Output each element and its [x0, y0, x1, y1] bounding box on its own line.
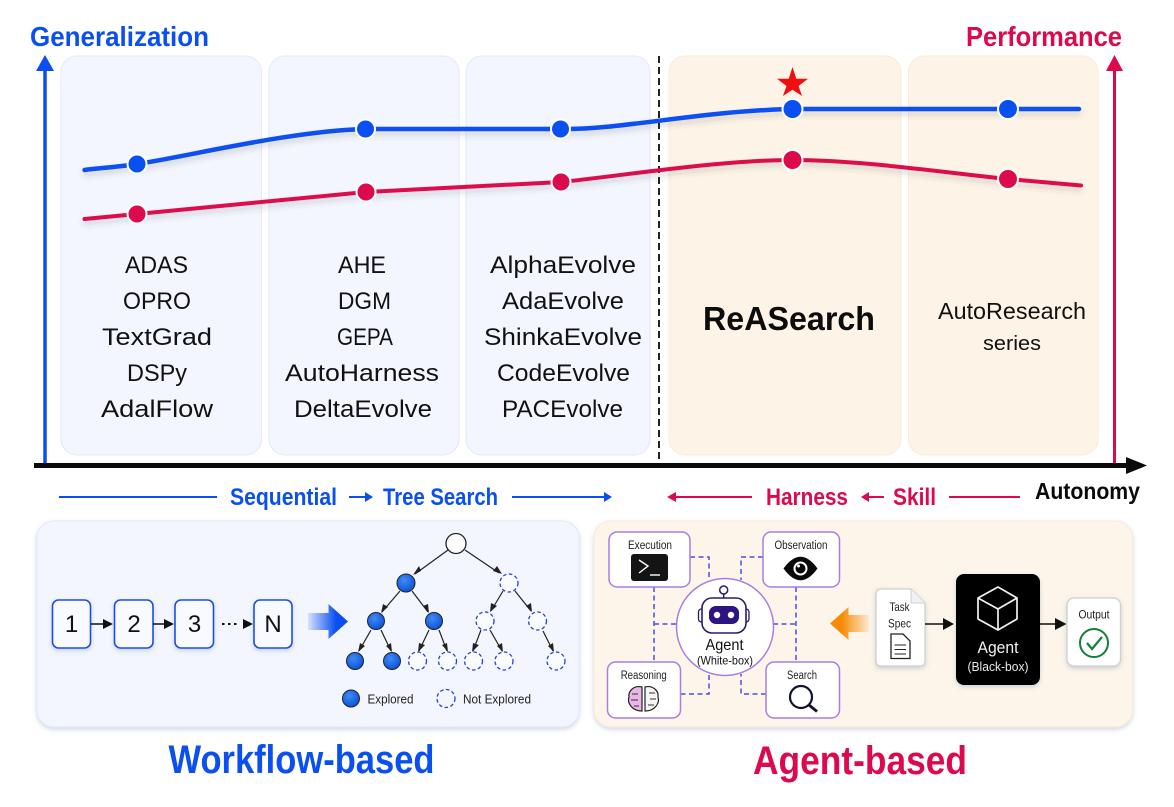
- panel: column AlphaEvolve group: [466, 56, 650, 455]
- sequential step boxes: 2: [127, 611, 141, 638]
- band: sequential to tree search: Sequential: [230, 484, 337, 511]
- text block: first method list: OPRO: [123, 288, 191, 315]
- text block: second method list: GEPA: [337, 324, 393, 351]
- arrow: sequential to tree: [308, 604, 348, 639]
- icon: red star: [777, 67, 808, 96]
- legend: not explored: Not Explored: [463, 692, 531, 706]
- heading: Workflow-based: Workflow-based: [168, 738, 434, 782]
- x axis: autonomy: [34, 457, 1147, 474]
- y axis: generalization: [36, 55, 54, 465]
- arrow: agent to output: [1040, 618, 1066, 630]
- text block: third method list: AdaEvolve: [502, 288, 624, 315]
- white-box agent circle: (White-box): [697, 654, 753, 668]
- axis title: Autonomy: Autonomy: [1035, 478, 1140, 504]
- text block: third method list: CodeEvolve: [497, 360, 630, 387]
- panel: column AHE group: [269, 56, 459, 455]
- black-box agent: Agent: [978, 638, 1019, 657]
- legend: explored: [342, 690, 414, 707]
- arrow: spec to agent: [925, 618, 954, 630]
- text block: first method list: DSPy: [127, 360, 187, 387]
- text block: second method list: [285, 252, 439, 423]
- panel: column ADAS group: [61, 56, 262, 455]
- text block: third method list: PACEvolve: [502, 396, 623, 423]
- band: skill to harness: Skill: [893, 484, 936, 511]
- legend: not explored: [437, 690, 531, 708]
- text block: third method list: ShinkaEvolve: [484, 324, 642, 351]
- panel: column ReASearch: [669, 56, 901, 455]
- card: observation: [763, 532, 840, 587]
- axis title: Generalization: Generalization: [30, 21, 209, 52]
- text block: ReASearch: ReASearch: [703, 300, 875, 337]
- document: task spec: Task: [890, 600, 910, 614]
- sequential step boxes: N: [264, 611, 282, 638]
- text block: third method list: [484, 252, 642, 423]
- card: output: [1067, 598, 1120, 666]
- text block: first method list: TextGrad: [102, 324, 212, 351]
- text block: first method list: [101, 252, 214, 423]
- white-box agent circle: [676, 578, 774, 676]
- black-box agent: (Black-box): [968, 659, 1028, 674]
- text block: AutoResearch series: series: [983, 333, 1041, 355]
- tree search diagram: [346, 534, 565, 670]
- document: task spec: [876, 589, 925, 666]
- text block: second method list: DGM: [338, 288, 391, 315]
- text block: AutoResearch series: AutoResearch: [938, 298, 1086, 324]
- divider: workflow and agent boundary: [658, 56, 660, 465]
- card: reasoning: Reasoning: [621, 670, 667, 682]
- sequential step boxes: 1: [65, 611, 78, 638]
- panel: agent-based: [594, 521, 1132, 727]
- dashed connectors: [654, 557, 796, 694]
- white-box agent circle: Agent: [706, 637, 744, 654]
- card: execution: Execution: [628, 540, 672, 552]
- text block: second method list: AHE: [338, 252, 386, 279]
- text block: AutoResearch series: [938, 298, 1086, 355]
- line chart: generalization curve: [84, 99, 1079, 174]
- heading: Agent-based: Agent-based: [753, 739, 967, 783]
- card: observation: Observation: [774, 540, 828, 552]
- text block: first method list: AdalFlow: [101, 396, 214, 423]
- sequential step boxes: [52, 600, 292, 648]
- band: sequential to tree search: [59, 484, 612, 511]
- band: skill to harness: Harness: [766, 484, 848, 511]
- band: sequential to tree search: Tree Search: [383, 484, 498, 511]
- card: search: Search: [787, 670, 817, 682]
- black-box agent: [956, 574, 1040, 685]
- sequential step boxes: 3: [188, 611, 201, 638]
- card: reasoning: [608, 662, 680, 718]
- icon: robot: [698, 586, 749, 633]
- band: skill to harness: [667, 484, 1020, 511]
- text block: first method list: ADAS: [125, 252, 188, 279]
- line chart: performance curve: [84, 150, 1081, 224]
- card: execution: [609, 532, 690, 587]
- text block: third method list: AlphaEvolve: [490, 252, 636, 279]
- text block: second method list: DeltaEvolve: [294, 396, 432, 423]
- panel: column AutoResearch: [908, 56, 1098, 455]
- axis title: Performance: Performance: [966, 21, 1122, 52]
- legend: explored: Explored: [368, 692, 414, 706]
- panel: workflow-based: [37, 521, 579, 727]
- card: search: [766, 662, 840, 718]
- document: task spec: Spec: [888, 616, 911, 630]
- y axis: performance: [1106, 55, 1123, 465]
- card: output: Output: [1078, 608, 1110, 622]
- arrow: black-box to white-box: [830, 607, 869, 640]
- text block: second method list: AutoHarness: [285, 360, 439, 387]
